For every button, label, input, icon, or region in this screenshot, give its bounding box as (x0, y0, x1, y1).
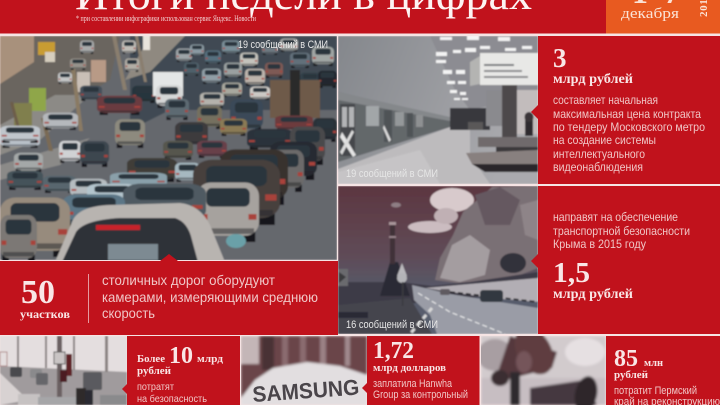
photo caption: 19 сообщений в СМИ (238, 39, 328, 51)
vegetation (338, 272, 538, 306)
ceiling lights (436, 36, 532, 100)
description: камерами, измеряющими среднюю (102, 289, 318, 305)
panel: 3 billion rubles (531, 36, 720, 184)
clouds (430, 188, 474, 212)
notch (122, 384, 127, 394)
road sign (397, 263, 407, 276)
description: направят на обеспечение (553, 210, 678, 224)
unit: участков (20, 307, 71, 321)
description: скорость (102, 305, 155, 321)
unit: млрд (197, 354, 224, 365)
description: заплатила Hanwha (373, 378, 453, 390)
description: интеллектуального (553, 147, 645, 161)
description: максимальная цена контракта (553, 107, 701, 121)
number: 10 (169, 343, 193, 369)
panel: 1.72 billion dollars (362, 336, 480, 405)
photo: loudspeakers (481, 336, 606, 405)
number: 1,5 (553, 257, 590, 289)
notch (601, 383, 606, 393)
floor (338, 127, 490, 184)
description: видеонаблюдения (553, 160, 643, 174)
unit line 2: рублей (614, 370, 648, 381)
photo: traffic jam (0, 36, 337, 263)
number: 3 (553, 43, 566, 73)
photo caption: 16 сообщений в СМИ (346, 319, 438, 331)
unit: млрд рублей (553, 72, 633, 87)
photo: Crimea road (338, 186, 538, 334)
photo: metro station (338, 36, 538, 184)
small distant cars (0, 39, 337, 148)
slope (425, 278, 538, 302)
number: 1,72 (373, 338, 414, 364)
description: на безопасность (137, 393, 207, 405)
description: на создание системы (553, 133, 656, 147)
header band (0, 0, 606, 34)
heading: Более (137, 354, 165, 365)
footnote: * при составлении инфографики использован сервис Яндекс. Новости (76, 13, 256, 23)
front silver car (55, 203, 225, 262)
panel: 1.5 billion rubles (531, 186, 720, 334)
lower horn (530, 380, 597, 405)
white truck (153, 72, 183, 96)
kiosk (517, 90, 538, 134)
description: столичных дорог оборудуют (102, 272, 276, 288)
unit: млн (644, 357, 664, 369)
month: декабря (621, 6, 679, 22)
notch (531, 254, 538, 268)
notch (160, 254, 178, 261)
description: потратят (137, 381, 174, 393)
description: Крыма в 2015 году (553, 237, 646, 251)
description: транспортной безопасности (553, 224, 690, 238)
brown truck (270, 80, 320, 118)
cliff (435, 186, 538, 283)
description: составляет начальная (553, 93, 658, 107)
photo caption: 19 сообщений в СМИ (346, 168, 438, 180)
description: потратит Пермский (614, 385, 697, 397)
number: 50 (21, 274, 55, 311)
notch (531, 105, 538, 119)
cars (480, 290, 503, 302)
unit line 2: рублей (137, 366, 171, 377)
train (338, 92, 450, 162)
upper horn (498, 336, 557, 380)
description: Group за контрольный (373, 389, 468, 401)
unit: млрд рублей (553, 287, 633, 302)
notch (362, 383, 367, 393)
panel: 85 million rubles (601, 336, 720, 405)
number: 85 (614, 346, 638, 372)
description: по тендеру Московского метро (553, 120, 705, 134)
photo: Samsung sign (241, 336, 367, 405)
road markings (418, 293, 505, 334)
panel: 50 sections (0, 254, 338, 335)
panel: 10 billion rubles (122, 336, 240, 405)
photo: road with traffic light (0, 336, 127, 405)
unit: млрд долларов (373, 362, 446, 374)
road (412, 285, 538, 334)
date block (606, 0, 720, 34)
